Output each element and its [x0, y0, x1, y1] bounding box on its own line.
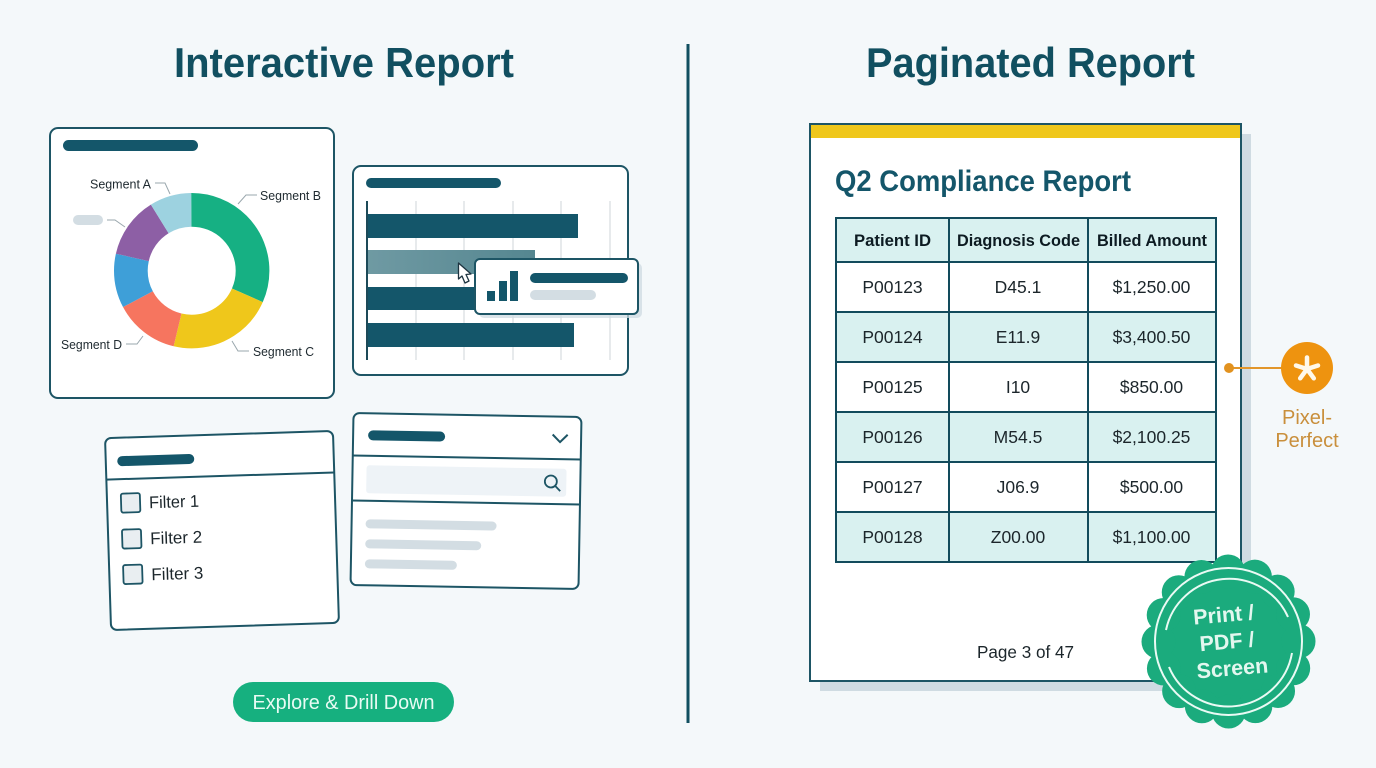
icon: cursor	[458, 263, 471, 283]
label: placeholder pill	[73, 215, 125, 227]
label: Segment A: Segment A	[90, 178, 152, 192]
row P00126: P00126	[862, 427, 923, 447]
label: Segment D	[61, 336, 143, 352]
label: Segment B	[238, 189, 321, 204]
stamp: Print / PDF / Screen: PDF /	[1199, 627, 1255, 656]
row P00125: P00125	[862, 377, 923, 397]
panel title bar	[63, 140, 198, 151]
filter 1	[121, 491, 199, 513]
icon: chevron	[553, 435, 568, 442]
row P00128: P00128	[862, 527, 923, 547]
row P00126: $2,100.25	[1113, 427, 1190, 447]
row P00128: $1,100.00	[1113, 527, 1191, 547]
table header: Billed Amount	[1097, 231, 1207, 250]
button: Explore & Drill Down: Explore & Drill Down	[252, 691, 434, 714]
panel title bar	[117, 454, 194, 466]
row P00125: I10	[1006, 377, 1030, 397]
row P00127: P00127	[862, 477, 923, 497]
label: Segment C: Segment C	[253, 345, 314, 359]
row P00124	[862, 327, 1191, 347]
stamp: Print / PDF / Screen: Screen	[1196, 653, 1269, 684]
row P00126	[862, 427, 1190, 447]
center divider	[686, 44, 690, 723]
icon: mini bars	[487, 271, 518, 301]
row P00127: $500.00	[1120, 477, 1183, 497]
page number: Page 3 of 47	[977, 642, 1074, 662]
filter 2	[122, 527, 202, 549]
callout: Pixel-Perfect: Pixel-	[1282, 407, 1332, 429]
report page	[810, 124, 1251, 691]
filter 1: Filter 1	[149, 492, 199, 512]
filter 2: Filter 2	[150, 528, 202, 548]
list placeholders	[365, 519, 497, 571]
row P00123	[862, 277, 1191, 297]
row P00123: P00123	[862, 277, 923, 297]
label: Segment D: Segment D	[61, 338, 122, 352]
callout: Pixel-Perfect: Perfect	[1275, 430, 1339, 452]
row P00127: J06.9	[997, 477, 1039, 497]
row P00125	[862, 377, 1183, 397]
filter 3	[123, 563, 204, 585]
stamp: Print / PDF / Screen: Print /	[1192, 600, 1255, 630]
search field	[366, 465, 567, 497]
filter 3: Filter 3	[151, 564, 204, 584]
row P00126: M54.5	[994, 427, 1042, 447]
table	[836, 218, 1216, 562]
yellow top band	[811, 125, 1240, 138]
table header: Patient ID	[854, 231, 931, 250]
icon: asterisk badge	[1281, 342, 1333, 394]
title: Interactive Report: Interactive Report	[174, 39, 514, 86]
row P00124: $3,400.50	[1113, 327, 1191, 347]
table header	[854, 231, 1207, 250]
tooltip	[475, 259, 642, 318]
row P00124: P00124	[862, 327, 923, 347]
panel title bar	[368, 430, 445, 442]
panel: donut chart	[50, 128, 334, 398]
label: Segment B: Segment B	[260, 189, 321, 203]
row P00125: $850.00	[1120, 377, 1183, 397]
panel: bar chart	[353, 166, 642, 375]
report heading: Q2 Compliance Report	[835, 165, 1131, 198]
donut chart	[131, 210, 253, 332]
row P00128	[862, 527, 1191, 547]
panel title bar	[366, 178, 501, 188]
bars	[367, 214, 578, 347]
label: Segment C	[232, 341, 314, 359]
table header: Diagnosis Code	[957, 231, 1080, 250]
stamp: Print / PDF / Screen	[1150, 564, 1306, 720]
callout: Pixel-Perfect	[1224, 342, 1339, 452]
row P00127	[862, 477, 1183, 497]
row P00128: Z00.00	[991, 527, 1046, 547]
label: Segment A	[90, 178, 170, 194]
row P00124: E11.9	[996, 327, 1040, 347]
button: Explore & Drill Down	[233, 682, 454, 722]
row P00123: D45.1	[995, 277, 1041, 297]
row P00123: $1,250.00	[1113, 277, 1191, 297]
panel: filters	[105, 431, 339, 630]
panel: search dropdown	[351, 413, 581, 589]
icon: magnifier	[545, 475, 560, 491]
title: Paginated Report: Paginated Report	[866, 39, 1195, 86]
